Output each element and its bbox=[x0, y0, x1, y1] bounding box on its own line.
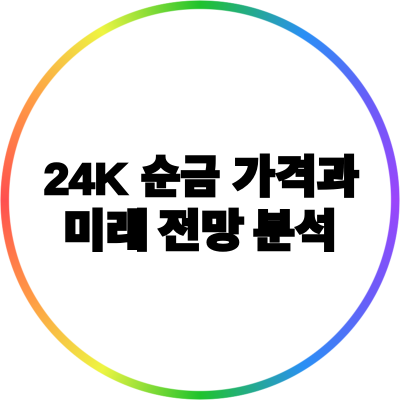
title line 1 bbox=[44, 153, 359, 204]
title line 2 bbox=[63, 207, 337, 256]
title line 1: 순금 bbox=[141, 153, 220, 202]
title line 1: 가격과 bbox=[233, 153, 359, 202]
title line 1: 24K bbox=[44, 155, 127, 204]
title line 2: 전망 bbox=[158, 207, 244, 256]
title line 2: 미래 bbox=[63, 207, 149, 256]
title line 2: 분석 bbox=[253, 207, 337, 256]
